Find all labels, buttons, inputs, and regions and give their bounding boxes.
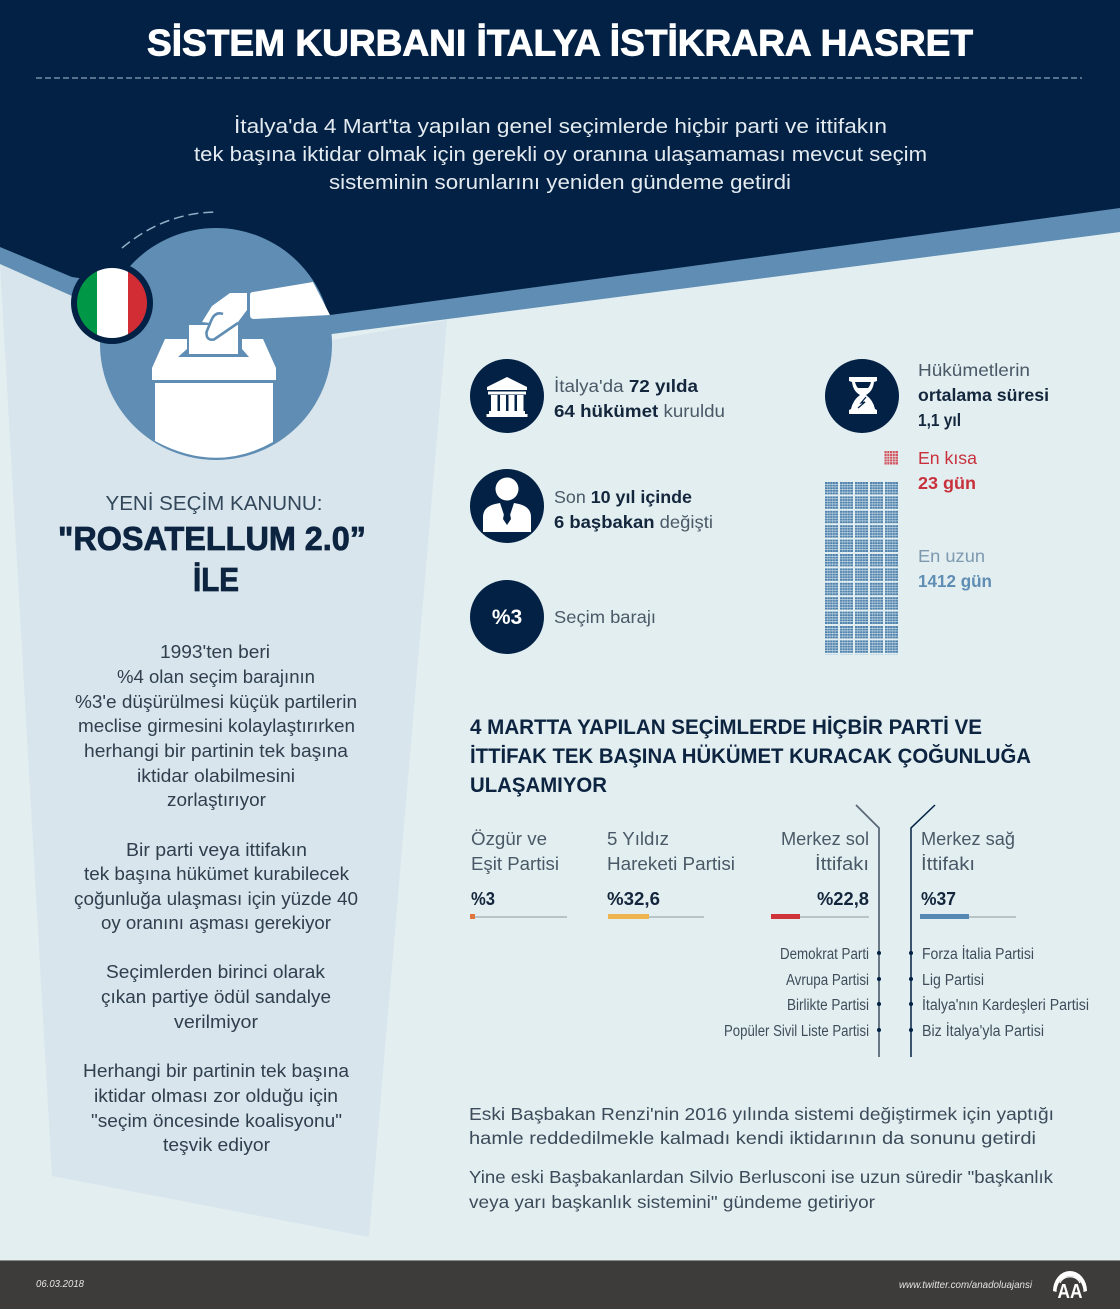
result: Merkez sağ: İttifakı <box>921 854 975 874</box>
label: longest: En uzun <box>918 546 985 566</box>
footer <box>0 1260 1120 1309</box>
heading: law: "ROSATELLUM 2.0” <box>58 520 366 557</box>
text: paragraph 1: %4 olan seçim barajının <box>117 667 315 687</box>
text: paragraph 1: iktidar olabilmesini <box>137 766 295 786</box>
result: 5 Yıldız <box>607 829 735 919</box>
header: navy background <box>0 0 1120 315</box>
text: paragraph 2: çoğunluğa ulaşması için yüzde 40 <box>74 889 358 909</box>
panel: left background <box>0 264 447 1237</box>
icon: government building <box>470 359 544 433</box>
result: Özgür ve Eşit <box>470 829 567 919</box>
list: centre-left parties: Birlikte Partisi <box>787 997 869 1014</box>
text: Berlusconi: veya yarı başkanlık sistemini" gündeme getiriyor <box>469 1192 875 1212</box>
intro text <box>194 115 927 194</box>
stat: prime ministers: 6 başbakan değişti <box>554 512 713 532</box>
result: Özgür ve Eşit: %3 <box>471 889 495 909</box>
heading: election results: 4 MARTTA YAPILAN SEÇİMLERDE HİÇBİR PARTİ VE <box>470 716 982 739</box>
icon: threshold badge <box>470 580 544 654</box>
stat: prime ministers <box>554 487 713 532</box>
panel: new election law <box>58 492 366 1155</box>
intro text: tek başına iktidar olmak için gerekli oy oranına ulaşamaması mevcut seçim <box>194 144 927 166</box>
intro text: sisteminin sorunlarını yeniden gündeme getirdi <box>329 172 791 194</box>
list: centre-right parties: Forza İtalia Partisi <box>922 945 1034 963</box>
icon: hourglass <box>825 359 899 433</box>
heading: law <box>58 492 366 598</box>
icon: Italian flag <box>71 262 153 344</box>
text: paragraph 3 <box>101 962 331 1032</box>
text: Renzi: hamle reddedilmekle kalmadı kendi iktidarının da sonunu getirdi <box>469 1128 1036 1148</box>
result: Merkez sol <box>771 829 869 919</box>
chart: longest government dots <box>825 482 898 655</box>
result: Merkez sol: İttifakı <box>815 854 869 874</box>
label: longest <box>918 546 992 591</box>
text: paragraph 4: iktidar olması zor olduğu için <box>94 1086 338 1106</box>
text: paragraph 1: herhangi bir partinin tek başına <box>84 741 349 761</box>
heading: law: İLE <box>193 561 239 598</box>
text: Berlusconi: Yine eski Başbakanlardan Silvio Berlusconi ise uzun süredir "başkanlık <box>469 1167 1053 1187</box>
heading: election results: İTTİFAK TEK BAŞINA HÜKÜMET KURACAK ÇOĞUNLUĞA <box>470 744 1031 768</box>
text: paragraph 2: oy oranını aşması gerekiyor <box>101 913 331 933</box>
result: Merkez sol: Merkez sol <box>781 829 869 849</box>
stat: average duration: ortalama süresi <box>918 385 1049 405</box>
stat: governments <box>554 376 725 421</box>
text: paragraph 4: Herhangi bir partinin tek başına <box>83 1061 350 1081</box>
text: paragraph 3: verilmiyor <box>174 1012 258 1032</box>
list: centre-left parties: Demokrat Parti <box>780 946 869 963</box>
list: centre-left parties: Avrupa Partisi <box>786 972 869 989</box>
stat: governments: İtalya'da 72 yılda <box>554 376 698 396</box>
stat: threshold: Seçim barajı <box>554 607 656 627</box>
footer: twitter: www.twitter.com/anadoluajansi <box>899 1279 1033 1291</box>
header band: blue edge <box>0 190 1120 360</box>
list: centre-right parties: Lig Partisi <box>922 972 984 989</box>
text: Renzi: Eski Başbakan Renzi'nin 2016 yılında sistemi değiştirmek için yaptığı <box>469 1104 1054 1124</box>
icon: threshold badge: %3 <box>492 606 522 629</box>
text: paragraph 4 <box>83 1061 350 1155</box>
list: centre-right parties: Biz İtalya'yla Partisi <box>922 1022 1044 1040</box>
label: shortest <box>918 448 977 493</box>
label: shortest: En kısa <box>918 448 977 468</box>
text: paragraph 4: "seçim öncesinde koalisyonu" <box>91 1111 342 1131</box>
logo: AA: AA <box>1058 1280 1083 1303</box>
title: SİSTEM KURBANI İTALYA İSTİKRARA HASRET <box>147 22 973 64</box>
result: Özgür ve Eşit: Eşit Partisi <box>471 854 559 874</box>
text: paragraph 4: teşvik ediyor <box>163 1135 270 1155</box>
heading: election results <box>470 716 1031 797</box>
result: Merkez sağ: Merkez sağ <box>921 829 1015 849</box>
result: 5 Yıldız: 5 Yıldız <box>607 829 669 849</box>
icon: ballot box in circle <box>100 212 332 460</box>
text: paragraph 1: zorlaştırıyor <box>167 790 266 810</box>
text: Berlusconi <box>469 1167 1053 1212</box>
heading: law: YENİ SEÇİM KANUNU: <box>106 492 322 515</box>
result: Merkez sağ <box>920 829 1016 919</box>
intro text: İtalya'da 4 Mart'ta yapılan genel seçimlerde hiçbir parti ve ittifakın <box>234 115 887 138</box>
stat: average duration: Hükümetlerin <box>918 360 1030 380</box>
text: paragraph 2: tek başına hükümet kurabilecek <box>84 864 350 884</box>
text: paragraph 3: çıkan partiye ödül sandalye <box>101 987 331 1007</box>
label: shortest: 23 gün <box>918 473 976 493</box>
stat: average duration <box>918 360 1049 430</box>
stat: prime ministers: Son 10 yıl içinde <box>554 487 692 507</box>
text: paragraph 1: %3'e düşürülmesi küçük partilerin <box>75 692 357 712</box>
icon: prime minister <box>470 469 544 543</box>
list: centre-left parties: Popüler Sivil Liste Partisi <box>724 1023 869 1040</box>
list: centre-right parties: İtalya'nın Kardeşleri Partisi <box>922 996 1089 1014</box>
footer: date: 06.03.2018 <box>36 1279 84 1290</box>
logo: AA <box>1053 1271 1087 1303</box>
result: Merkez sol: %22,8 <box>817 889 869 909</box>
text: paragraph 1: meclise girmesini kolaylaştırırken <box>78 716 355 736</box>
result: 5 Yıldız: %32,6 <box>607 889 660 909</box>
text: paragraph 2: Bir parti veya ittifakın <box>126 840 307 860</box>
text: paragraph 1: 1993'ten beri <box>160 642 270 662</box>
stat: average duration: 1,1 yıl <box>918 410 961 430</box>
chart: shortest government dots <box>884 451 898 464</box>
result: 5 Yıldız: Hareketi Partisi <box>607 854 735 874</box>
list: centre-left parties <box>724 805 881 1057</box>
heading: election results: ULAŞAMIYOR <box>470 774 607 797</box>
text: Renzi <box>469 1104 1054 1148</box>
text: paragraph 2 <box>74 840 358 933</box>
label: longest: 1412 gün <box>918 571 992 591</box>
text: paragraph 3: Seçimlerden birinci olarak <box>106 962 326 982</box>
list: centre-right parties <box>909 805 1089 1057</box>
result: Merkez sağ: %37 <box>921 889 956 909</box>
text: paragraph 1 <box>75 642 357 810</box>
stat: governments: 64 hükümet kuruldu <box>554 401 725 421</box>
result: Özgür ve Eşit: Özgür ve <box>471 829 547 849</box>
